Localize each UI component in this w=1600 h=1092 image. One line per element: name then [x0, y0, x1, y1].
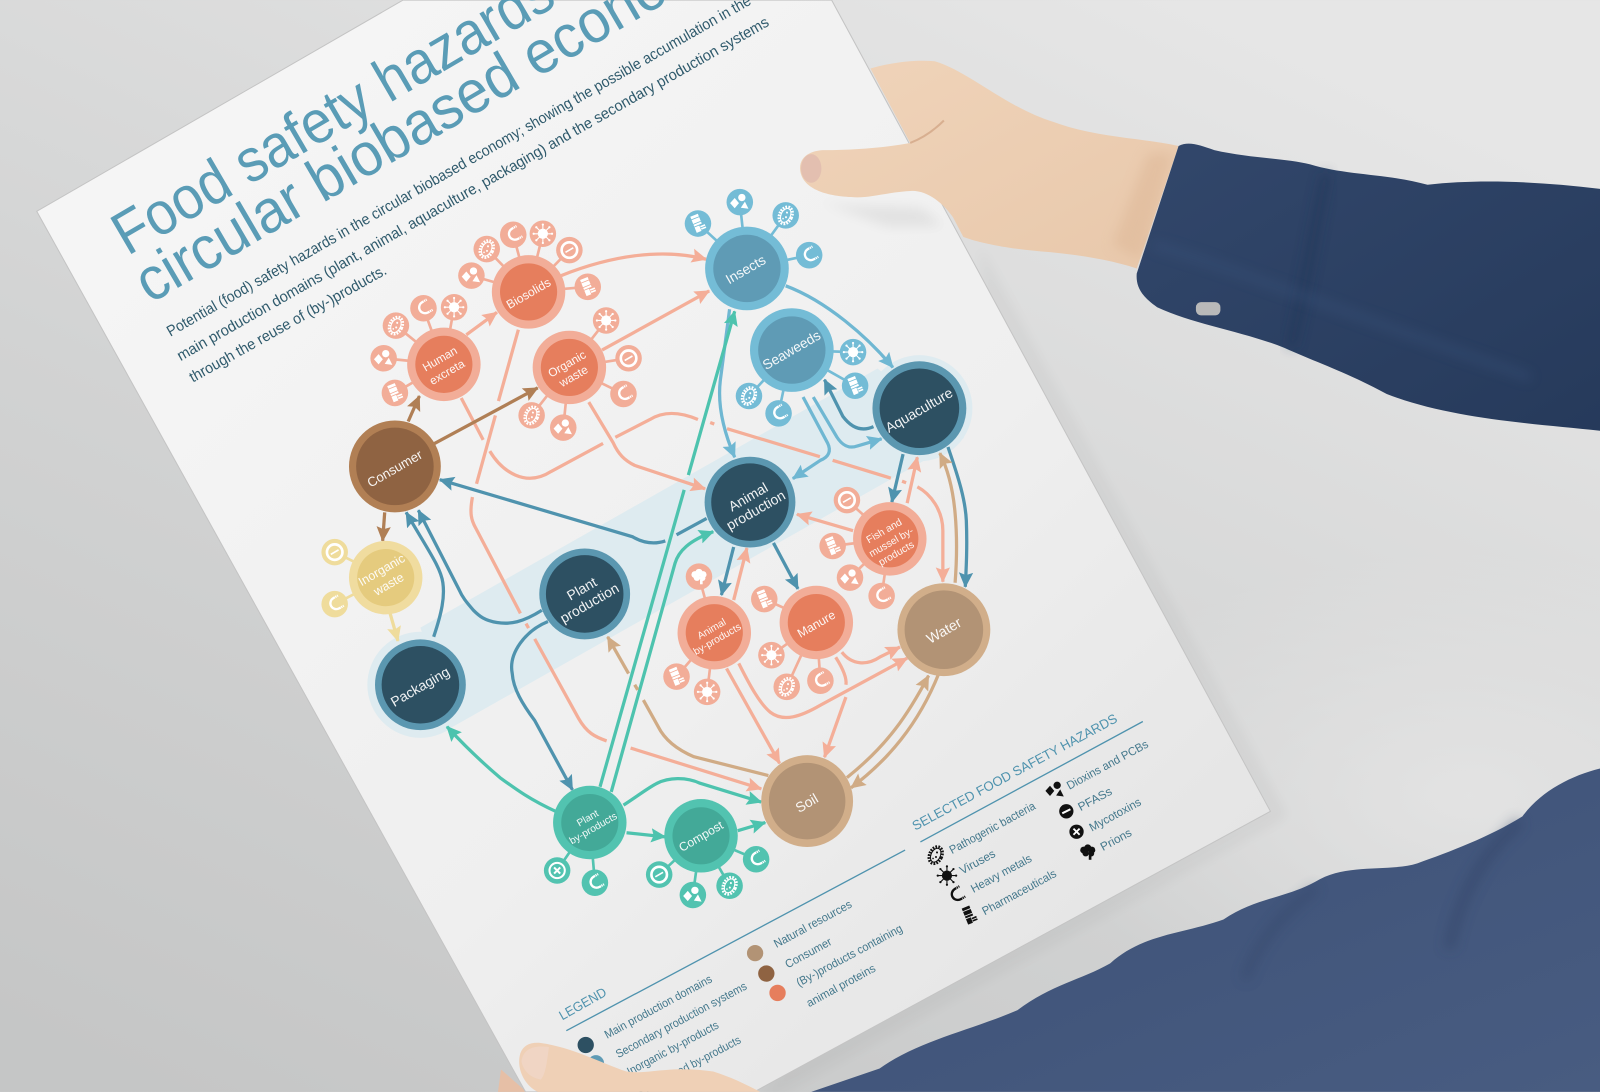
- circle: Manure: Manure: [795, 608, 838, 641]
- node: Inorganic waste with hazards: [321, 539, 422, 617]
- lower sleeve: [811, 768, 1600, 1092]
- circle: Fish and mussel by-products: Fish and: [865, 517, 904, 546]
- legend heading: LEGEND: [556, 984, 609, 1023]
- arrows: consumer flows: [383, 388, 538, 641]
- hazard bubbles: Compost: [646, 836, 769, 908]
- node: Human excreta with hazards: [370, 294, 481, 406]
- legend labels: [602, 898, 905, 1092]
- left thumb over the sheet: [519, 1043, 760, 1092]
- circle: Organic waste: Organic: [545, 348, 588, 380]
- node: Seaweeds with hazards: [736, 308, 868, 427]
- node: Organic waste with hazards: [518, 307, 642, 441]
- legend labels: Consumer: [783, 935, 834, 971]
- arrows: plant by-product flows: [447, 311, 765, 837]
- circle: Biosolids: [492, 255, 565, 329]
- circle: Fish and mussel by-products: [853, 502, 927, 576]
- hazard key labels: Prions: [1098, 826, 1134, 854]
- arrows: main production flows: [406, 380, 967, 790]
- intro text: through the reuse of (by-)products.: [186, 262, 390, 386]
- circle: Inorganic waste: waste: [370, 570, 406, 599]
- hazard bubbles: Organic waste: [518, 307, 642, 441]
- hazard bubbles: Human excreta: [370, 294, 467, 406]
- node: Animal production: production: [723, 487, 788, 533]
- hazard bubbles: Plant by-products: [544, 823, 608, 896]
- node: Water: Water: [924, 615, 965, 648]
- circle: Organic waste: waste: [556, 362, 591, 390]
- right hand holding the sheet: [800, 61, 1179, 268]
- hazard key labels: Pharmaceuticals: [980, 867, 1059, 918]
- hazard key labels: Pathogenic bacteria: [947, 799, 1038, 857]
- poster sheet: [37, 0, 1270, 1092]
- hazard bubbles: Inorganic waste: [321, 539, 386, 617]
- node: Animal production: [705, 457, 795, 548]
- node: Biosolids with hazards: [458, 220, 601, 329]
- selected food safety hazards key: [910, 711, 1151, 925]
- left finger behind the sheet: [498, 1069, 527, 1092]
- diagonal band linking main production domains: [367, 355, 972, 738]
- arrows: natural resource flows: [608, 453, 957, 788]
- hazard key icons: [927, 782, 1095, 925]
- node: Aquaculture: [872, 361, 966, 455]
- circle: Plant by-products: [553, 786, 627, 859]
- legend labels: (By-)products containing: [794, 922, 905, 989]
- hazards heading: SELECTED FOOD SAFETY HAZARDS: [910, 711, 1120, 833]
- circle: Insects: Insects: [723, 252, 768, 287]
- circle: Inorganic waste: [349, 541, 422, 614]
- circle: Seaweeds: Seaweeds: [760, 328, 823, 373]
- legend labels: Natural resources: [772, 898, 854, 951]
- hazard key labels: Heavy metals: [969, 852, 1034, 896]
- node: Consumer: Consumer: [364, 447, 425, 490]
- hazard bubbles: Seaweeds: [736, 339, 868, 427]
- node: Manure with hazards: [751, 586, 853, 700]
- legend swatches: [578, 945, 786, 1072]
- circle: Plant by-products: by-products: [568, 811, 619, 847]
- circle: Plant by-products: Plant: [575, 808, 601, 829]
- node: Consumer: [349, 420, 441, 512]
- circle: Inorganic waste: Inorganic: [356, 551, 407, 589]
- circle: Human excreta: Human: [420, 344, 460, 374]
- node: Compost with hazards: [646, 799, 769, 908]
- hazard bubbles: Animal by-products: [663, 563, 720, 705]
- hazard bubbles: Manure: [751, 586, 834, 700]
- legend labels: animal proteins: [804, 962, 878, 1010]
- node: Soil: Soil: [793, 790, 821, 816]
- node: Water: [897, 583, 990, 676]
- circle: Organic waste: [533, 331, 606, 404]
- legend labels: Inorganic by-products: [625, 1019, 721, 1078]
- arrows: secondary system flows: [720, 286, 893, 479]
- circle: Human excreta: [407, 328, 481, 401]
- arrows: by-product flows: [466, 254, 943, 789]
- intro text: main production domains (plant, animal, aquaculture, packaging) and the secondary production systems: [174, 14, 772, 365]
- hazard key labels: [947, 738, 1151, 918]
- hazard bubbles: Fish and mussel: [819, 487, 895, 609]
- salmon connecting lines: [461, 330, 906, 741]
- circle: Animal by-products: by-products: [692, 622, 743, 658]
- hazard bubbles: Insects: [685, 189, 822, 268]
- legend labels: Secondary production systems: [614, 980, 749, 1061]
- circle: Fish and mussel by-products: products: [877, 540, 916, 569]
- node: Packaging: Packaging: [388, 663, 452, 710]
- node: Plant production: production: [557, 580, 622, 626]
- circle: Biosolids: Biosolids: [504, 275, 553, 312]
- circle: Human excreta: excreta: [427, 357, 468, 388]
- node: Insects with hazards: [685, 189, 822, 310]
- node: Plant production: Plant: [564, 574, 600, 603]
- upper sleeve: [1137, 144, 1600, 431]
- circle: Animal by-products: Animal: [696, 617, 728, 642]
- legend: [556, 850, 905, 1092]
- hazard key labels: Mycotoxins: [1087, 796, 1144, 834]
- circle: Compost: Compost: [676, 818, 726, 855]
- node: Packaging: [375, 639, 466, 730]
- node: Plant production: [539, 549, 630, 639]
- shadow of the sheet: [755, 245, 1288, 1092]
- node: Fish and mussel by-products with hazards: [819, 487, 927, 609]
- circle: Animal by-products: [678, 596, 751, 669]
- circle: Fish and mussel by-products: mussel by-: [868, 526, 916, 560]
- node: Soil: [761, 755, 853, 847]
- node: Animal production: Animal: [726, 479, 771, 514]
- hazard key labels: Dioxins and PCBs: [1065, 738, 1151, 793]
- node: Plant by-products with hazards: [544, 786, 627, 896]
- hazard bubbles: Biosolids: [458, 220, 601, 300]
- node: Animal by-products with hazards: [663, 563, 751, 705]
- node: Aquaculture: Aquaculture: [882, 384, 956, 436]
- hazard key labels: Viruses: [957, 847, 998, 877]
- legend labels: Main production domains: [602, 973, 715, 1041]
- hazard key labels: PFASs: [1076, 785, 1114, 814]
